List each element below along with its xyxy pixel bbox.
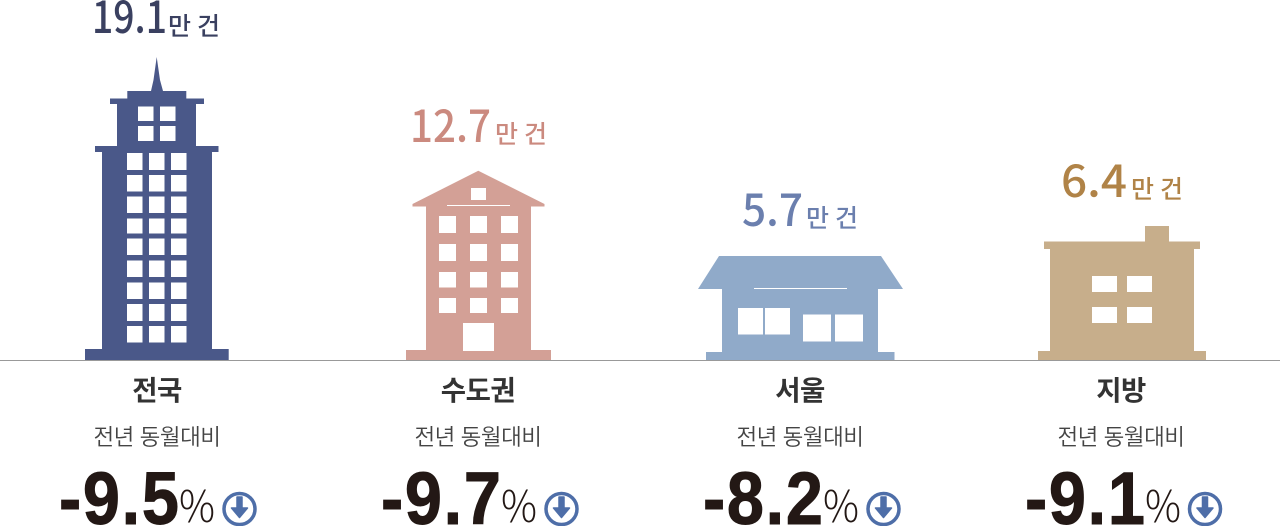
value: 6.4: 6.4 <box>1061 146 1127 210</box>
column: 지방 <box>1025 146 1220 526</box>
unit: 만 건: 만 건 <box>806 199 858 235</box>
heading: 수도권: 수도권 <box>441 368 515 408</box>
heading: 전국: 전국 <box>132 368 182 408</box>
heading: 서울: 서울 <box>775 368 825 408</box>
icon: down arrow <box>546 494 577 524</box>
icon: flat-roof house <box>1038 226 1206 360</box>
icon: apartment building <box>406 171 551 360</box>
unit: 만 건: 만 건 <box>168 7 220 43</box>
column: 수도권 <box>381 91 577 526</box>
unit: 만 건: 만 건 <box>1131 170 1183 206</box>
icon: down arrow <box>224 494 255 524</box>
text: 전년 동월대비: 전년 동월대비 <box>736 420 864 452</box>
icon: down arrow <box>1190 494 1220 524</box>
icon: low-rise house <box>698 256 903 360</box>
value: 5.7: 5.7 <box>742 175 803 239</box>
icon: tower building <box>85 57 229 360</box>
text: 전년 동월대비: 전년 동월대비 <box>93 420 221 452</box>
icon: down arrow <box>868 494 899 524</box>
value: 12.7: 12.7 <box>410 91 491 155</box>
column: 전국 <box>59 0 255 526</box>
text: 전년 동월대비: 전년 동월대비 <box>414 420 542 452</box>
column: 서울 <box>703 175 899 526</box>
text: 전년 동월대비: 전년 동월대비 <box>1057 420 1185 452</box>
heading: 지방: 지방 <box>1096 368 1146 408</box>
unit: 만 건: 만 건 <box>495 115 547 151</box>
